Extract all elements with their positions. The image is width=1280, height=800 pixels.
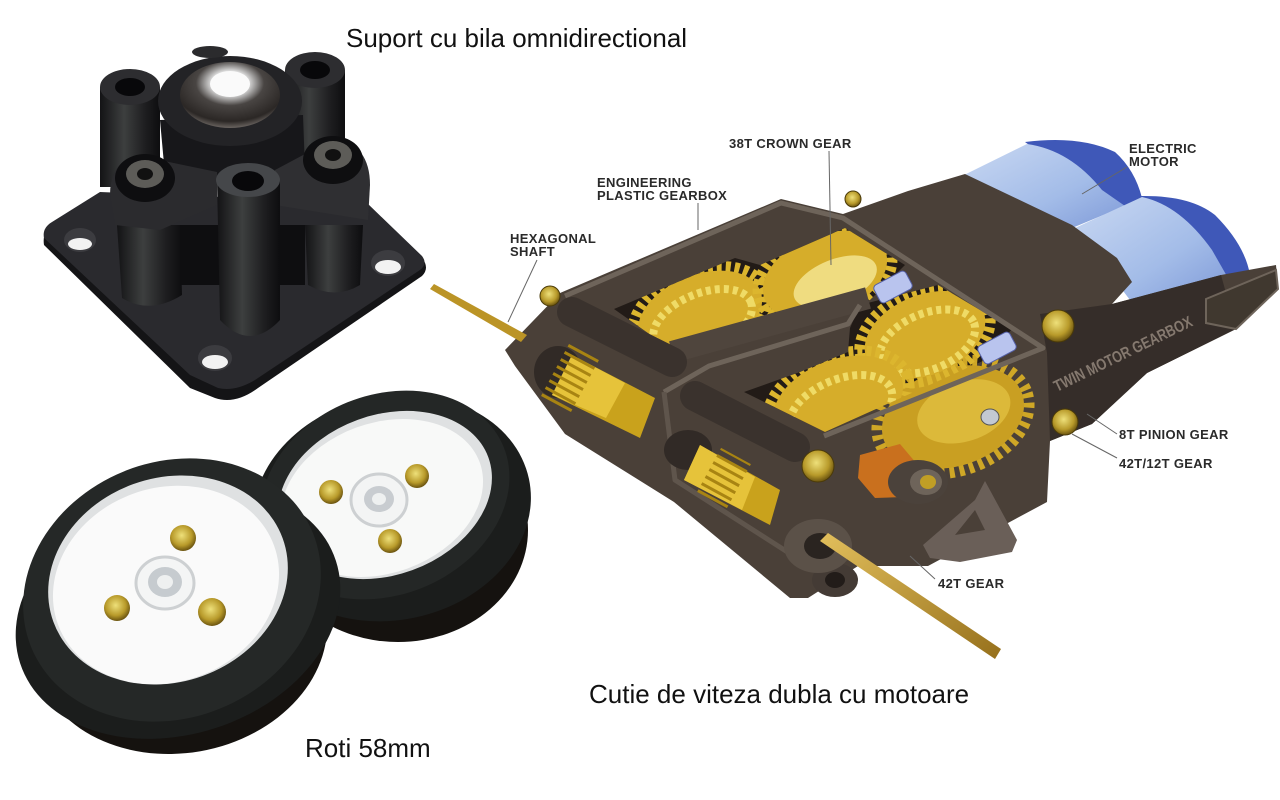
callout: hexagonal shaft [508,231,596,322]
gear: back left [629,261,772,344]
legs [117,225,363,306]
brass screws [540,191,1078,482]
callout: 42T gear [910,556,1005,591]
hexagonal shaft: front [820,533,1001,659]
callout: engineering plastic gearbox: ENGINEERING [597,175,692,190]
gold spur gear: left [534,346,655,438]
orange hex nut [858,444,922,498]
twin motor gearbox illustration [430,140,1278,659]
tail connector [1206,270,1278,329]
callout: electric motor [1082,141,1197,194]
callout: engineering plastic gearbox [597,175,727,230]
callout: electric motor: MOTOR [1129,154,1179,169]
gold spur gear: right [664,430,780,525]
hexagonal shaft: rear [430,284,527,342]
main housing [505,174,1278,598]
callout: 42T/12T gear: 42T/12T GEAR [1119,456,1213,471]
right arm [275,138,370,220]
back pillars [100,52,345,187]
callout: hexagonal shaft: HEXAGONAL [510,231,596,246]
frame struts [565,203,1043,560]
callout: pinion gear [1087,414,1229,442]
gears: upper [629,228,898,344]
side panel [1040,275,1236,441]
callout: pinion gear: 8T PINION GEAR [1119,427,1229,442]
callout: hexagonal shaft: SHAFT [510,244,555,259]
42T gear [862,342,1044,492]
mounting hook [923,481,1017,562]
blue pinion gears [872,270,1018,365]
small silver pin [981,409,999,425]
caption: wheels: Roti 58mm [305,733,431,763]
dome under ball [160,115,305,184]
front pillar [216,163,280,336]
gears: lower [765,285,996,432]
gear opening: lower [744,285,1012,432]
gear: right [854,285,996,388]
caption: gearbox: Cutie de viteza dubla cu motoare [589,679,969,709]
back wheel [229,354,552,647]
ball caster support photo [44,46,426,400]
front wheel [0,414,374,779]
left arm [110,156,217,230]
tubes [572,312,795,447]
motor: upper [962,140,1142,228]
screws [115,46,363,202]
gear opening: upper [614,228,905,350]
ball housing [158,56,302,146]
bottom shaft bearing [784,519,858,597]
gearbox lettering: TWIN MOTOR GEARBOX [1051,314,1196,396]
callout: 42T/12T gear [1072,434,1213,471]
bearing with bolt [888,460,948,504]
base plate [44,192,426,400]
callout: electric motor: ELECTRIC [1129,141,1197,156]
callout: engineering plastic gearbox: PLASTIC GEARBOX [597,188,727,203]
callout: crown gear: 38T CROWN GEAR [729,136,852,151]
motor: lower [1075,196,1250,300]
callout: 42T gear: 42T GEAR [938,576,1005,591]
caption: ball caster: Suport cu bila omnidirectional [346,23,687,53]
gear: middle [765,346,913,432]
callout: crown gear [729,136,852,265]
gear: crown [753,228,898,314]
